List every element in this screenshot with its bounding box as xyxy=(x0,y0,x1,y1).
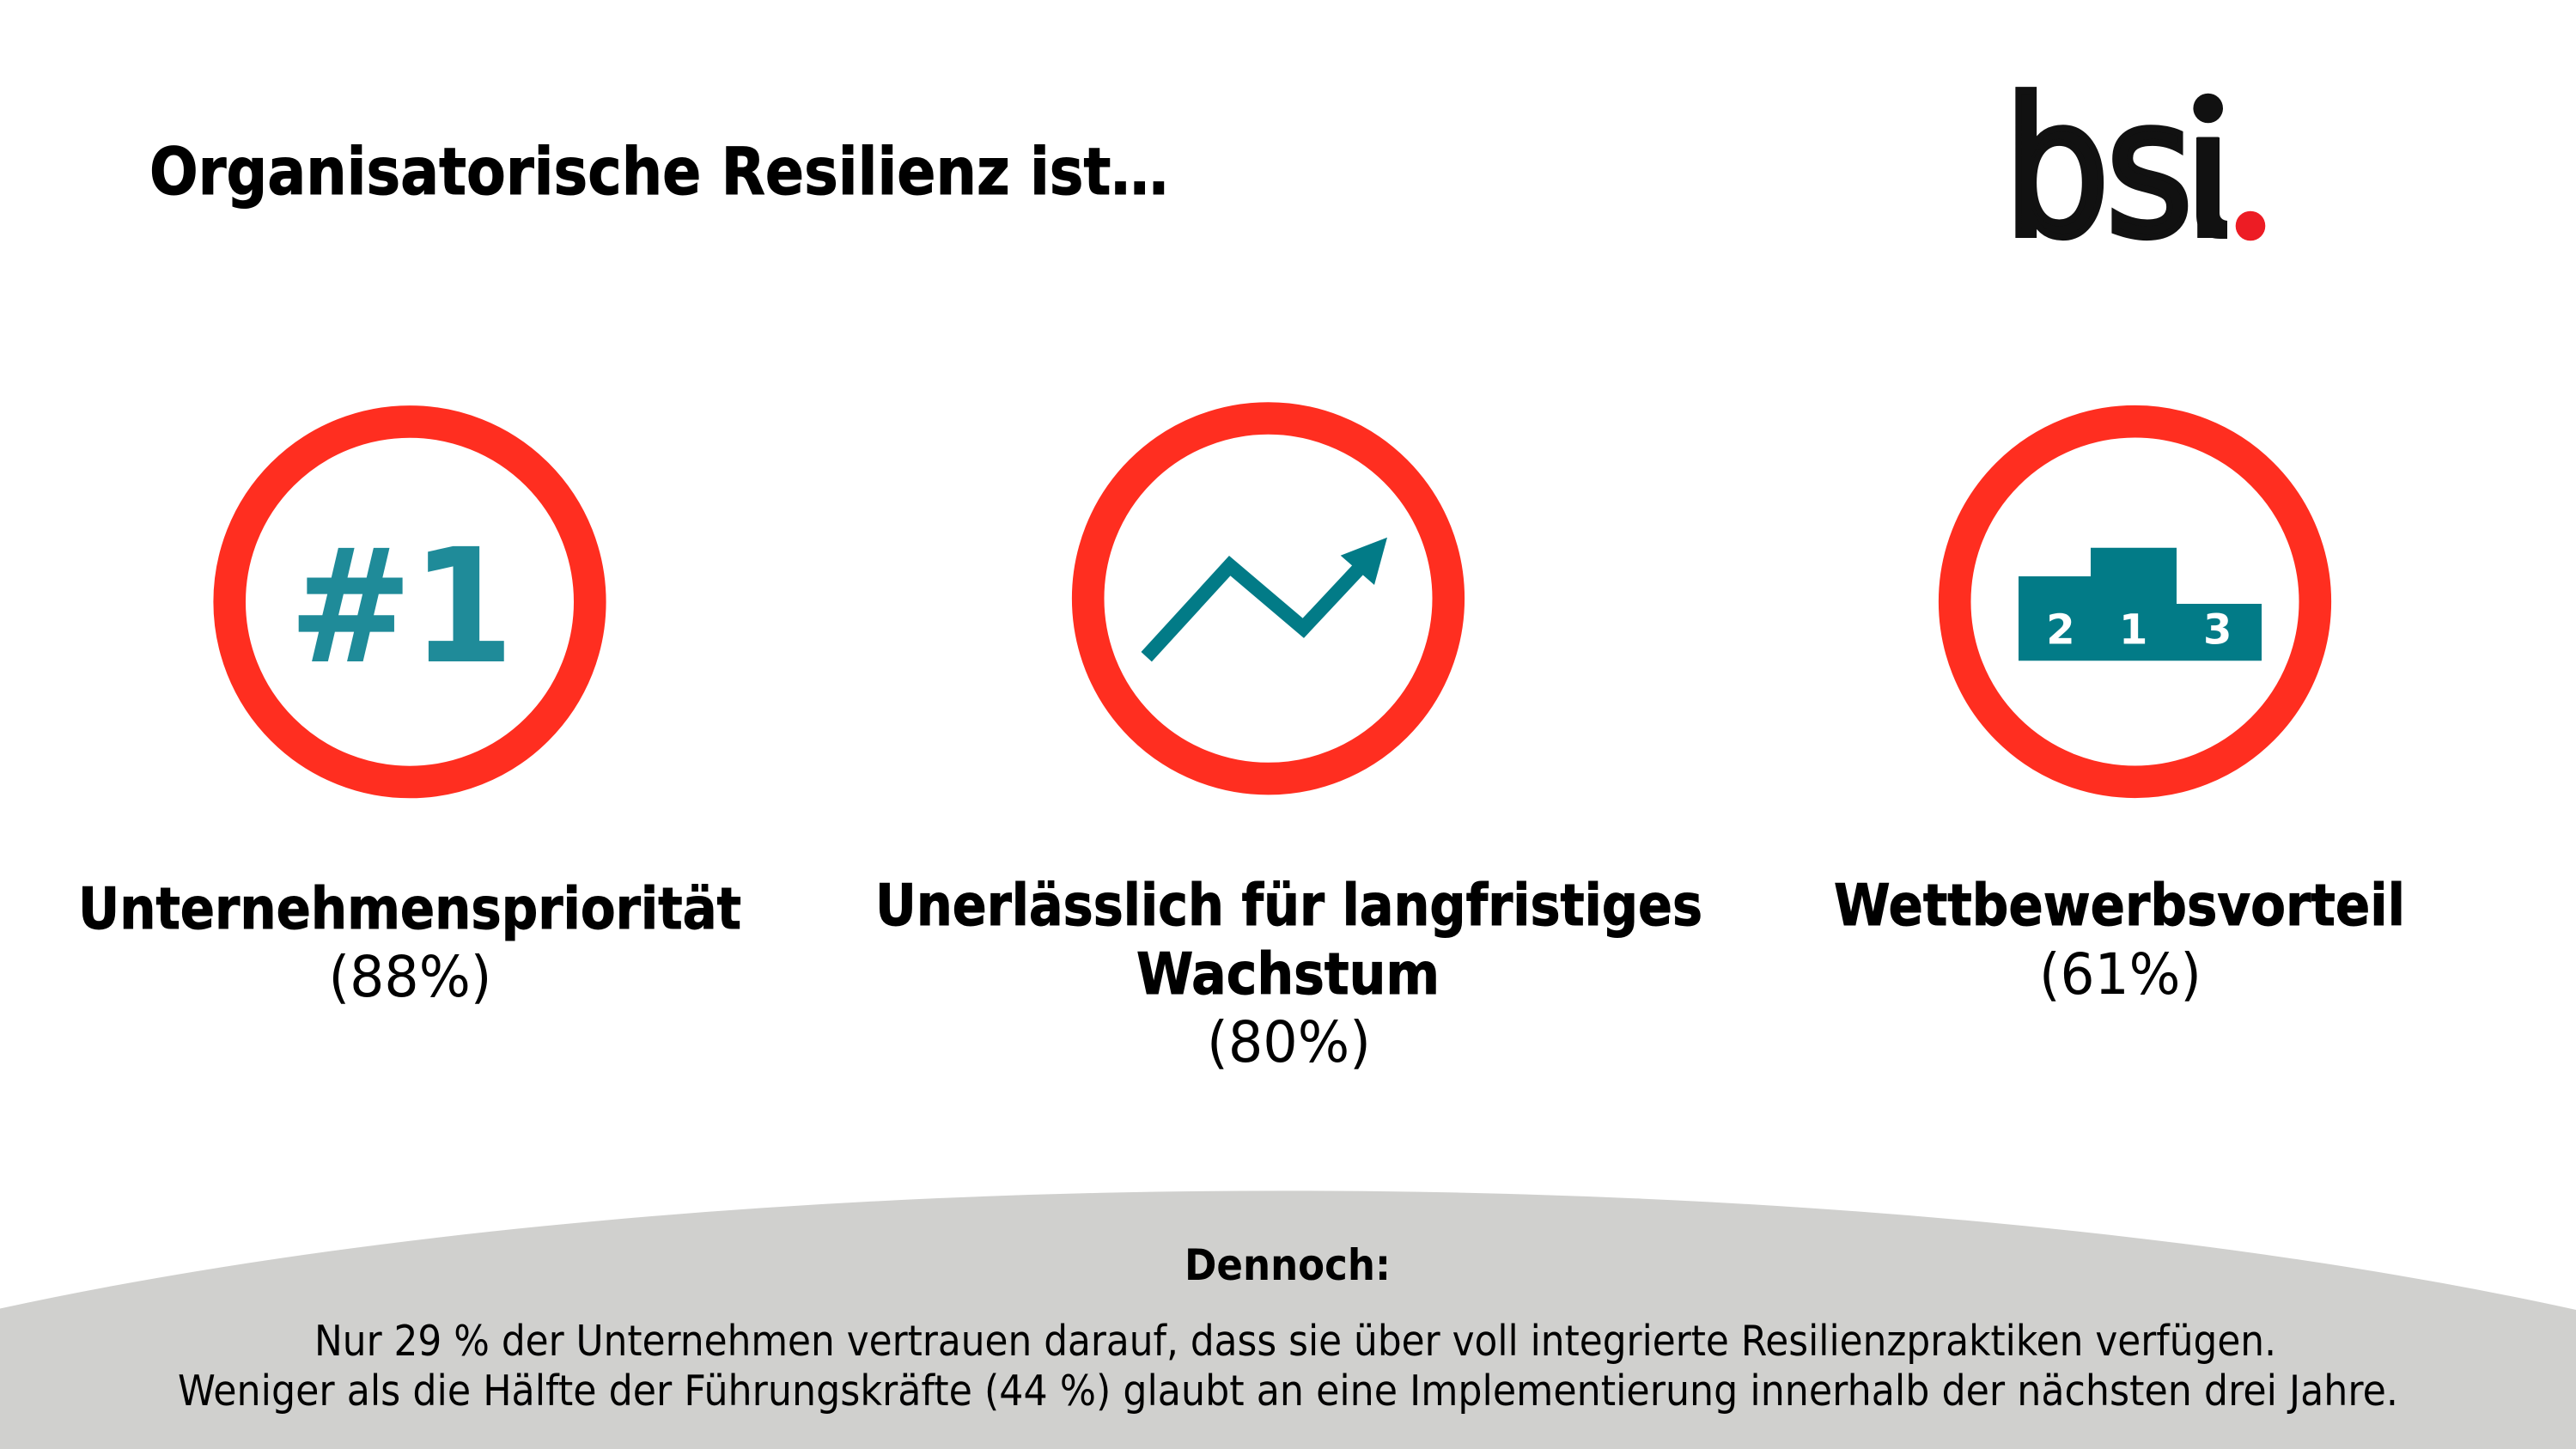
icon: rising trend arrow xyxy=(1088,418,1448,779)
heading and value xyxy=(875,872,1702,1075)
icon: podium: 2 xyxy=(2046,606,2075,654)
logo: bsi: bsi xyxy=(2003,59,2232,280)
callout text: Weniger als die Hälfte der Führungskräfte (44 %) glaubt an eine Implementierung innerhalb der nächsten drei Jahre. xyxy=(178,1367,2398,1416)
icon: podium xyxy=(1955,422,2315,782)
icon: number one badge: #1 xyxy=(289,516,515,699)
heading and value: (88%) xyxy=(328,944,491,1010)
title: Organisatorische Resilienz ist… xyxy=(149,133,1168,210)
callout heading: Dennoch: xyxy=(1184,1240,1391,1290)
panel: bottom callout xyxy=(0,1190,2576,1449)
panel: Unerlässlich für langfristiges Wachstum xyxy=(875,418,1702,1075)
panel: Unternehmenspriorität xyxy=(78,422,741,1010)
icon: number one badge xyxy=(229,422,590,782)
panel: Wettbewerbsvorteil xyxy=(1834,422,2405,1008)
heading and value xyxy=(78,875,741,1010)
heading and value: (80%) xyxy=(1207,1009,1371,1075)
callout text: Nur 29 % der Unternehmen vertrauen darauf, dass sie über voll integrierte Resilienzpraktiken verfügen. xyxy=(314,1317,2276,1366)
heading and value: Unternehmenspriorität xyxy=(78,875,741,942)
grey arc background xyxy=(0,1190,2576,1449)
heading and value: Wachstum xyxy=(1136,941,1440,1008)
heading and value: (61%) xyxy=(2039,941,2201,1008)
heading and value xyxy=(1834,872,2405,1008)
heading and value: Unerlässlich für langfristiges xyxy=(875,872,1702,939)
callout text xyxy=(178,1317,2398,1416)
icon: podium: 1 xyxy=(2119,606,2147,654)
heading and value: Wettbewerbsvorteil xyxy=(1834,872,2405,939)
icon: podium: 3 xyxy=(2203,606,2232,654)
